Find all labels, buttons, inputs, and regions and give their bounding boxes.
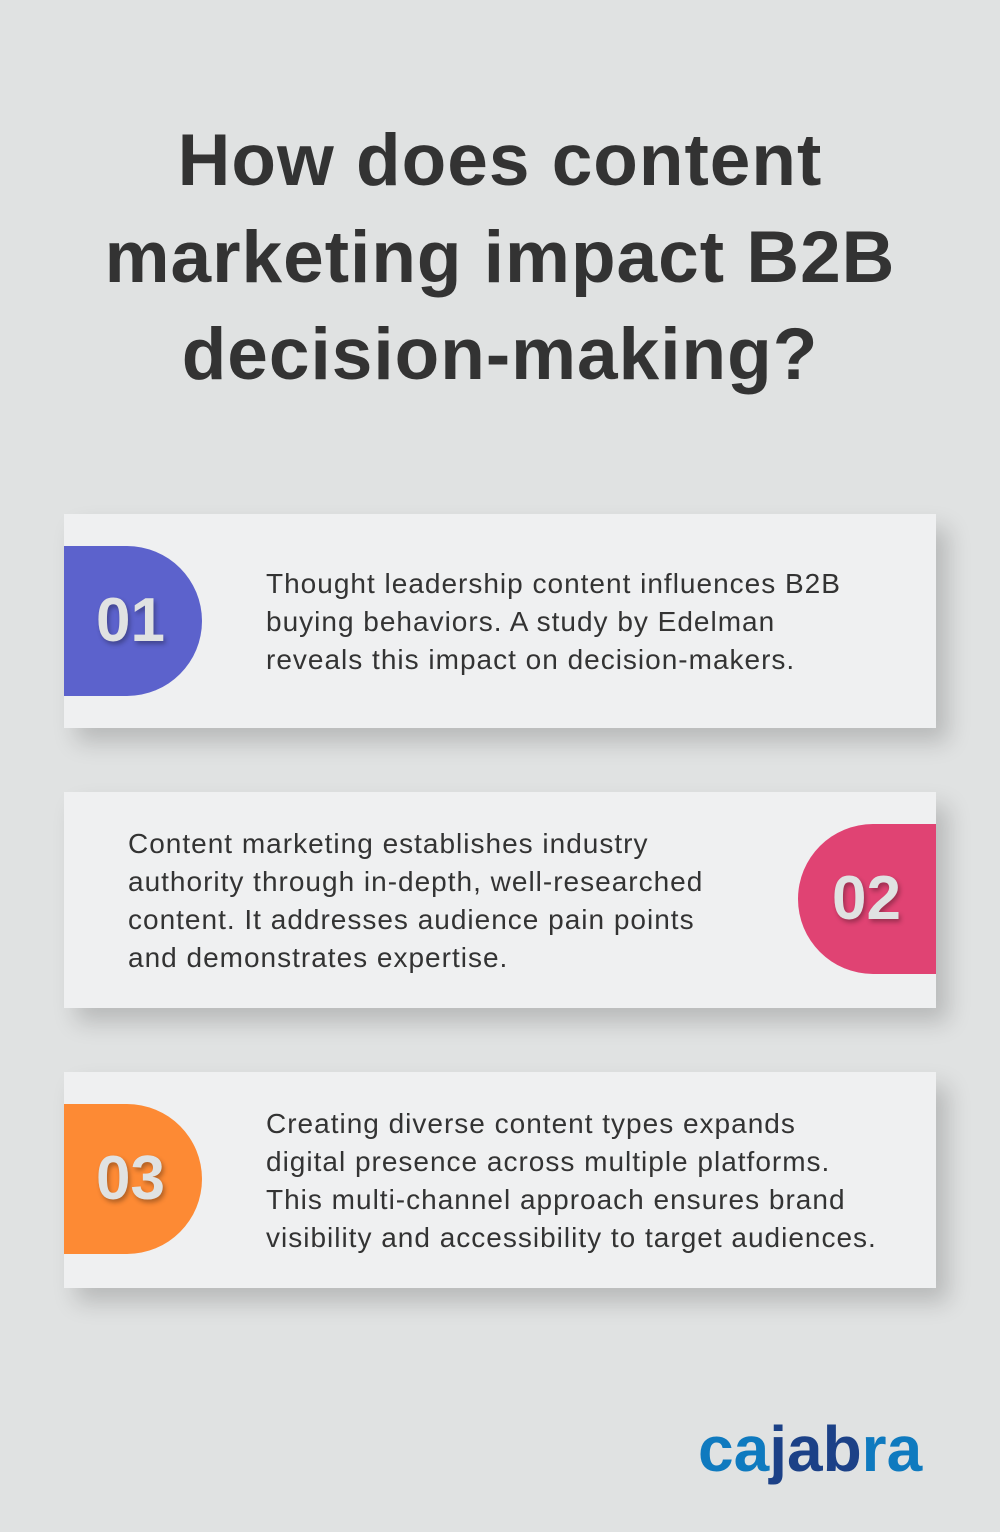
- text 1: [266, 568, 841, 675]
- text 2: [128, 828, 703, 973]
- title: decision-making?: [182, 314, 818, 395]
- panel: card 3: [64, 1072, 936, 1288]
- text 2: Content marketing establishes industry: [128, 828, 648, 859]
- text 1: buying behaviors. A study by Edelman: [266, 606, 775, 637]
- badge 03: [64, 1104, 202, 1254]
- logo: cajabra: cajabra: [698, 1413, 922, 1485]
- text 3: Creating diverse content types expands: [266, 1108, 796, 1139]
- panel: card 1: [64, 514, 936, 728]
- badge 01: 01: [96, 586, 165, 655]
- panel: card 2: [64, 792, 936, 1008]
- text 2: authority through in-depth, well-researched: [128, 866, 703, 897]
- text 2: content. It addresses audience pain points: [128, 904, 695, 935]
- badge 02: 02: [832, 864, 901, 933]
- badge 02: [798, 824, 936, 974]
- text 3: digital presence across multiple platforms.: [266, 1146, 830, 1177]
- text 1: reveals this impact on decision-makers.: [266, 644, 795, 675]
- title: How does content: [178, 120, 822, 201]
- text 3: [266, 1108, 877, 1253]
- text 2: and demonstrates expertise.: [128, 942, 508, 973]
- text 3: visibility and accessibility to target audiences.: [266, 1222, 877, 1253]
- badge 03: 03: [96, 1144, 165, 1213]
- title: marketing impact B2B: [105, 217, 895, 298]
- badge 01: [64, 546, 202, 696]
- text 3: This multi-channel approach ensures brand: [266, 1184, 846, 1215]
- title: [105, 120, 895, 395]
- text 1: Thought leadership content influences B2B: [266, 568, 841, 599]
